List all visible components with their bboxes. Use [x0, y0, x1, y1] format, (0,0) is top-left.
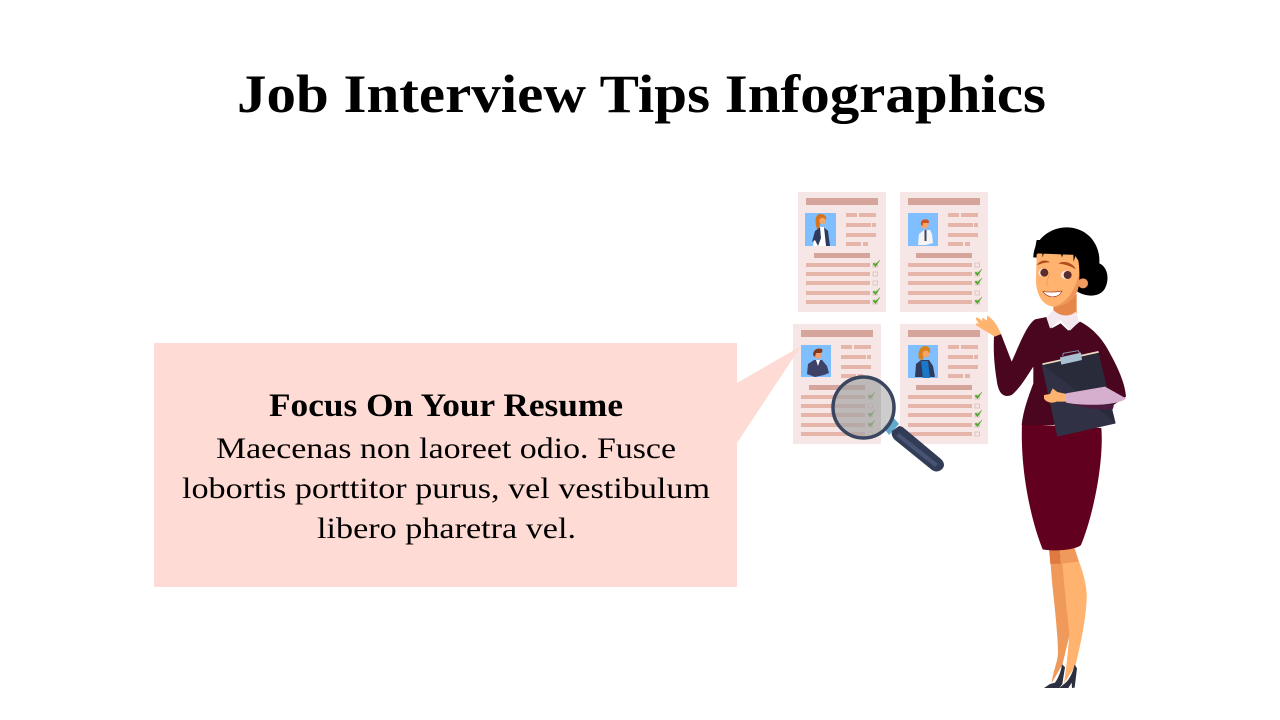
- nose: [1047, 273, 1050, 287]
- candidate photo: woman in dark blazer: [805, 213, 836, 246]
- raised hand: [976, 316, 1001, 337]
- resume card: bottom left: [793, 324, 881, 444]
- face: [1036, 253, 1079, 307]
- checklist ticks: [975, 392, 982, 436]
- shirt collar: [1046, 310, 1079, 331]
- icon: magnifying glass: [833, 377, 944, 472]
- character: businesswoman presenting: [976, 227, 1126, 688]
- ear: [1078, 278, 1088, 288]
- sweater and sleeve: [994, 317, 1126, 425]
- forearm and hand on clipboard: [1044, 387, 1126, 410]
- eyes: [1038, 269, 1072, 279]
- smile: [1043, 291, 1062, 297]
- checklist ticks: [975, 263, 982, 304]
- checklist ticks: [873, 260, 880, 304]
- callout body text: [182, 432, 710, 545]
- checklist ticks: [868, 392, 875, 436]
- legs: [1044, 548, 1087, 688]
- callout heading: Focus On Your Resume: [269, 388, 623, 424]
- shoes: [1044, 664, 1065, 688]
- clipboard: [1042, 351, 1116, 437]
- hair and bun: [1033, 227, 1108, 296]
- resume card: top left: [798, 192, 886, 312]
- callout body text: Maecenas non laoreet odio. Fusce: [216, 432, 676, 465]
- fringe: [1033, 240, 1081, 262]
- callout: focus on your resume: [154, 343, 801, 587]
- title: Job Interview Tips Infographics: [237, 64, 1046, 124]
- callout body text: libero pharetra vel.: [317, 512, 576, 545]
- candidate photo: man in white shirt: [908, 213, 938, 246]
- candidate photo: woman in blue top: [908, 345, 938, 378]
- eyebrows: [1037, 261, 1075, 269]
- callout panel with pointer: [154, 343, 801, 587]
- candidate photo: man in dark suit: [801, 345, 831, 377]
- skirt: [1022, 424, 1102, 550]
- neck: [1053, 294, 1077, 317]
- resume card: bottom right: [900, 324, 988, 444]
- resume card: top right: [900, 192, 988, 312]
- callout body text: lobortis porttitor purus, vel vestibulum: [182, 472, 710, 505]
